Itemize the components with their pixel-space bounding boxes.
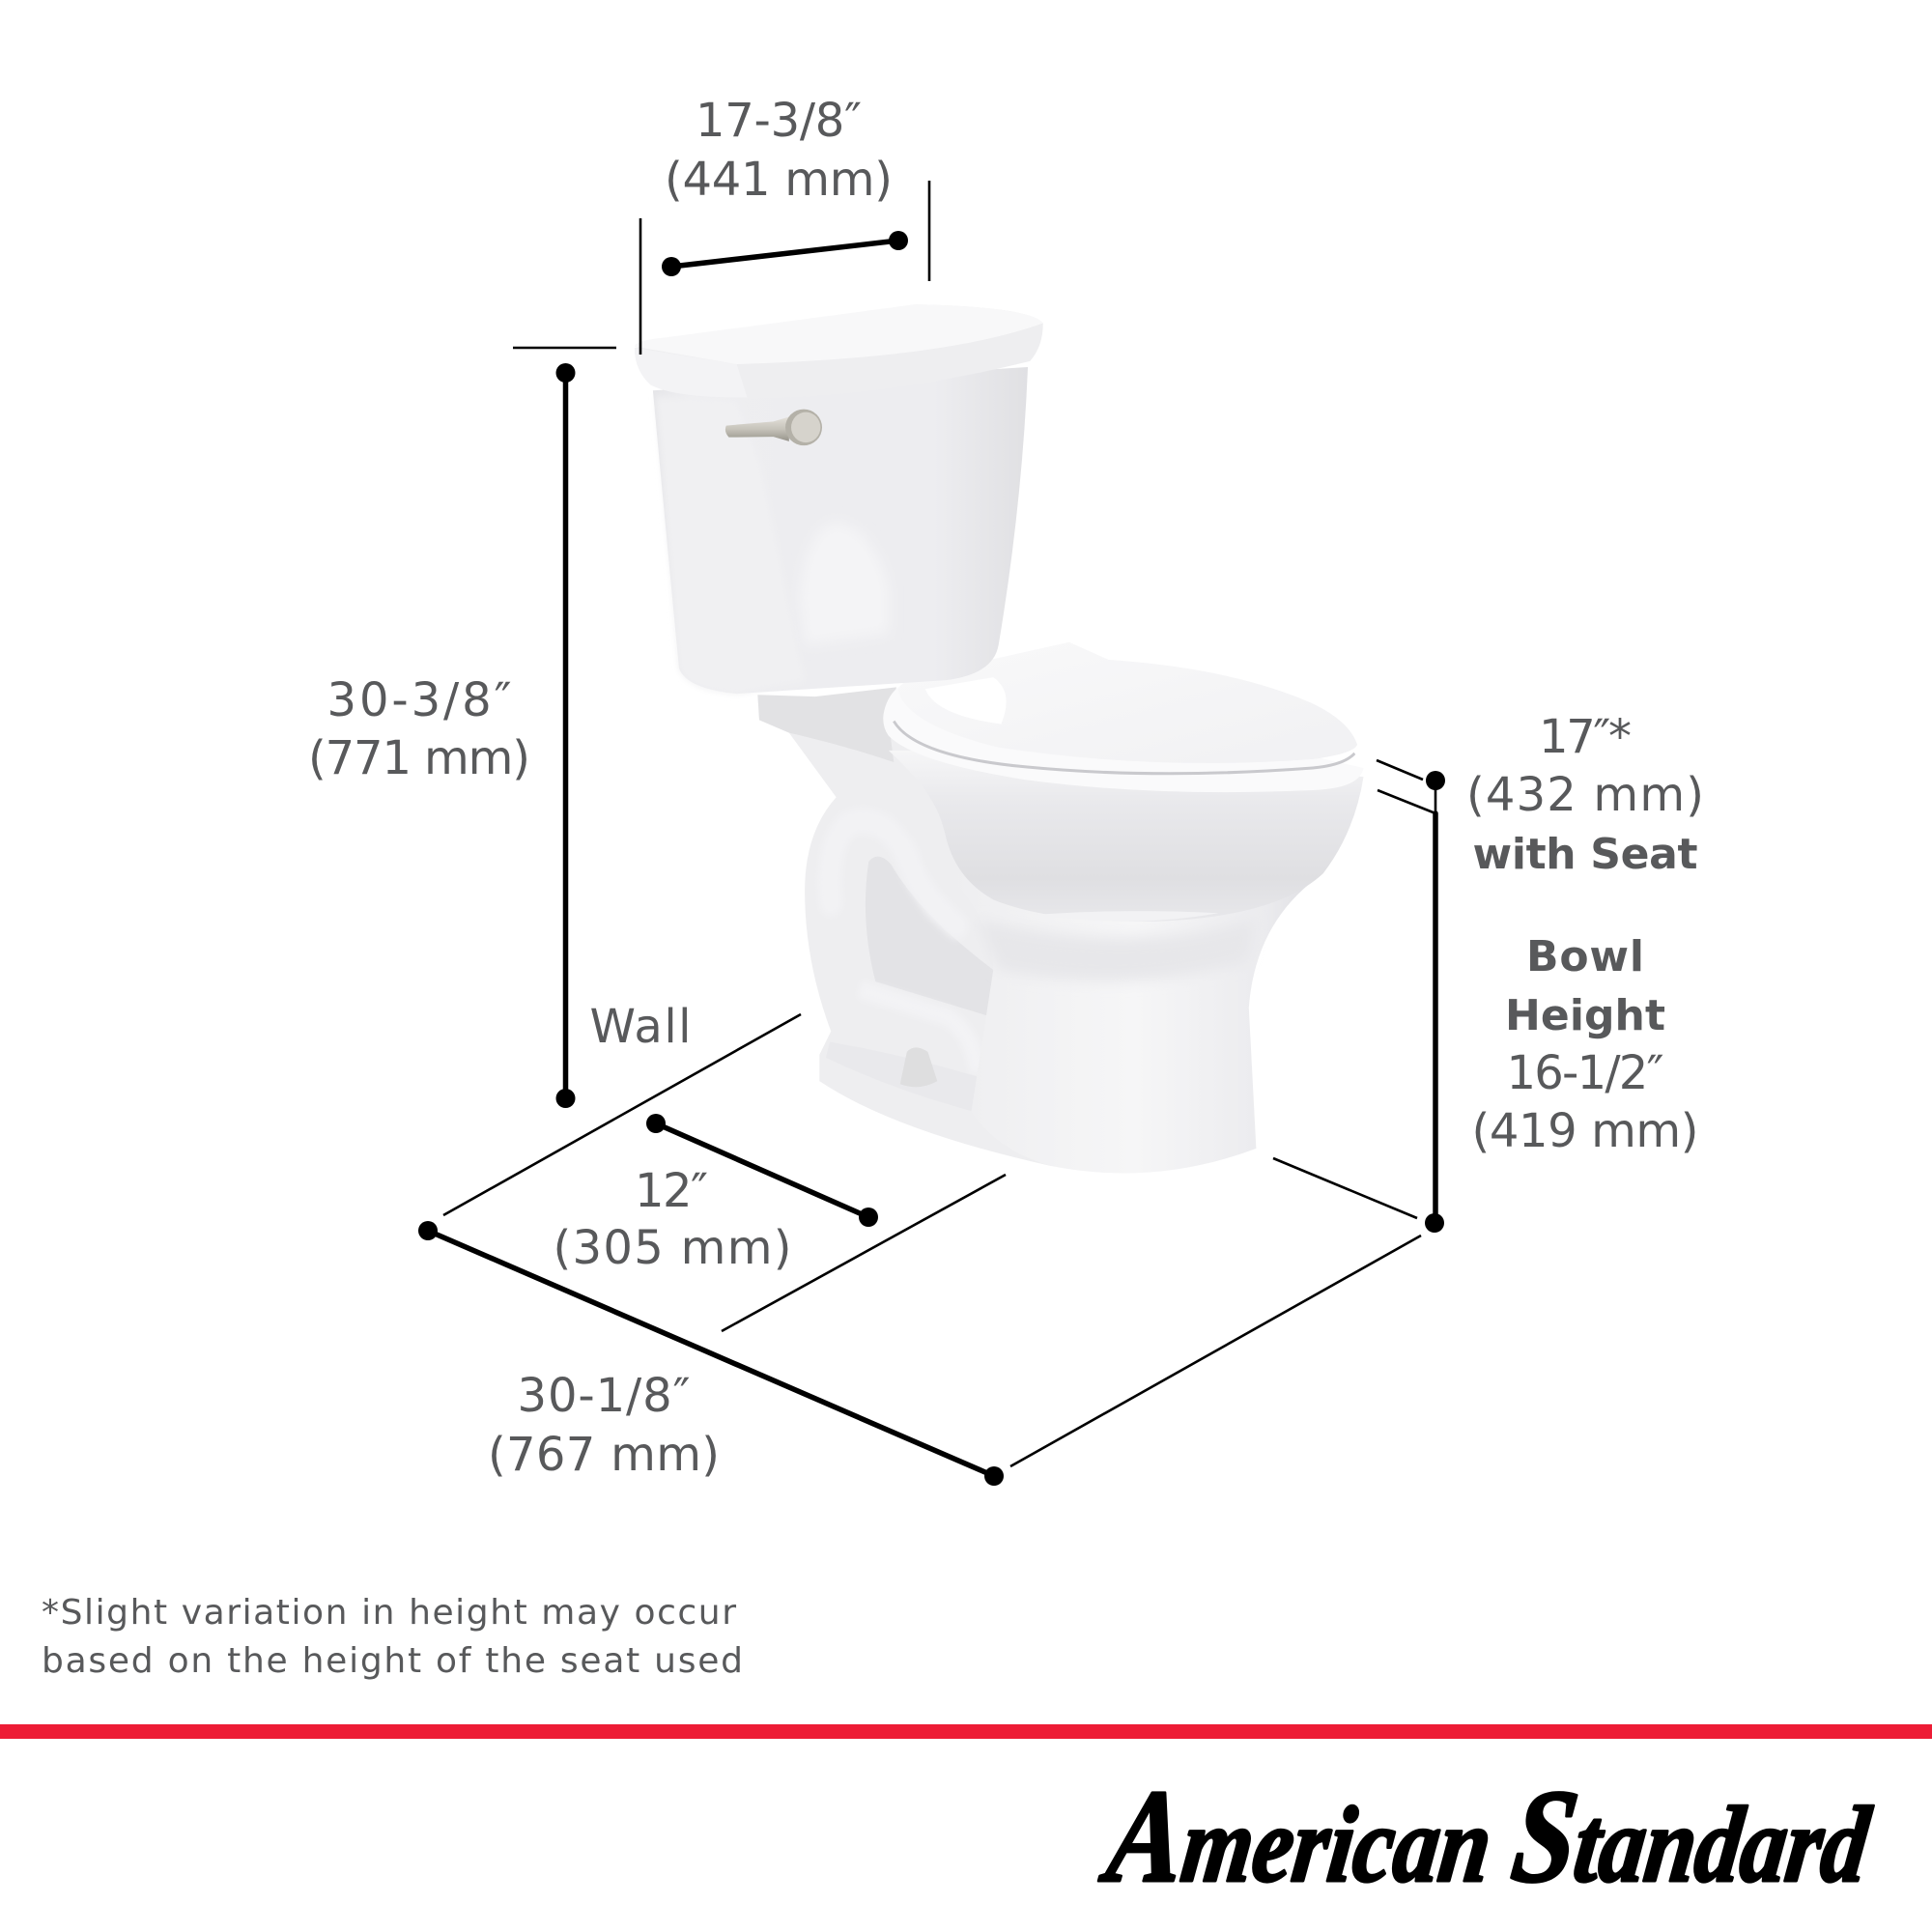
dimension: tank width bbox=[640, 94, 929, 355]
footnote: *Slight variation in height may occur bbox=[42, 1593, 736, 1633]
toilet: neck shadow bbox=[978, 921, 1255, 981]
toilet: bolt cap bbox=[900, 1047, 937, 1087]
label: bowl height: Height bbox=[1505, 991, 1665, 1040]
logo: American Standard: American Standard bbox=[1094, 1762, 1880, 1910]
label: bowl height: Bowl bbox=[1526, 932, 1644, 981]
toilet: seat gap bbox=[894, 722, 1354, 774]
toilet: tank lid band bbox=[635, 304, 1043, 398]
label: wall: Wall bbox=[589, 1000, 692, 1054]
toilet: rear trapway silhouette bbox=[789, 733, 1155, 1166]
dimension: overall height: (771 mm) bbox=[308, 731, 530, 785]
toilet: tank lid corner bbox=[635, 348, 747, 398]
toilet: seat ring bbox=[883, 687, 1364, 792]
red divider bar bbox=[0, 1724, 1932, 1739]
label: height with seat: 17″* bbox=[1539, 710, 1632, 764]
toilet: connector deck bbox=[757, 687, 896, 762]
toilet: lid highlight bbox=[925, 677, 1007, 724]
toilet: bowl bbox=[889, 751, 1364, 922]
dimension: tank width: 17-3/8″ bbox=[696, 94, 862, 148]
toilet: flush handle bbox=[725, 410, 822, 445]
toilet: lower rail bbox=[860, 989, 978, 1072]
dimension: overall height: 30-3/8″ bbox=[327, 673, 512, 727]
label: height with seat: with Seat bbox=[1472, 830, 1698, 879]
dimension: bowl height bbox=[1273, 760, 1445, 1233]
dimension: overall height bbox=[308, 348, 616, 1108]
toilet: bowl lower highlight bbox=[1040, 911, 1218, 922]
dimension: overall depth bbox=[418, 1221, 1421, 1486]
toilet: tank left facet bbox=[656, 396, 805, 694]
toilet: tank highlight bbox=[800, 523, 889, 645]
label: bowl height: 16-1/2″ bbox=[1507, 1046, 1663, 1100]
footnote: based on the height of the seat used bbox=[42, 1641, 743, 1681]
toilet product image bbox=[635, 304, 1364, 1173]
label: height with seat: (432 mm) bbox=[1466, 768, 1704, 822]
toilet: trap cavity bbox=[866, 857, 994, 1017]
label: height with seat bbox=[1466, 710, 1704, 879]
label: bowl height bbox=[1472, 932, 1698, 1158]
footnote bbox=[42, 1593, 743, 1681]
toilet: pedestal bbox=[946, 873, 1323, 1173]
dimension: overall depth: 30-1/8″ bbox=[518, 1369, 690, 1423]
dimension: rough-in: (305 mm) bbox=[553, 1221, 792, 1275]
toilet: seat lid bbox=[898, 642, 1357, 763]
toilet: trap tube highlight bbox=[830, 821, 956, 926]
toilet: tank body bbox=[653, 367, 1028, 694]
dimension: tank width: (441 mm) bbox=[665, 153, 893, 207]
dimension: rough-in: 12″ bbox=[635, 1164, 708, 1218]
dimension: overall depth: (767 mm) bbox=[488, 1428, 720, 1482]
toilet: tank lid top bbox=[635, 304, 1043, 364]
label: bowl height: (419 mm) bbox=[1472, 1104, 1698, 1158]
dimension: rough-in bbox=[443, 1014, 1006, 1331]
toilet: foot interior bbox=[826, 1042, 982, 1111]
